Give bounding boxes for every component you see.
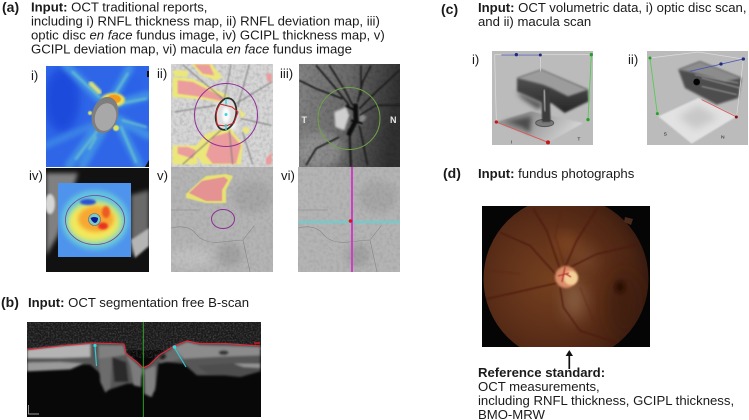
label c ii: ii) [628, 52, 638, 67]
reference standard text: OCT measurements, [478, 379, 600, 394]
image iii: optic disc en face fundus image: N [390, 115, 396, 125]
panel c heading: and ii) macula scan [478, 14, 591, 29]
panel a heading [2, 0, 385, 56]
label i: i) [31, 68, 38, 83]
label iv: iv) [29, 168, 43, 183]
panel c heading: (c) [441, 1, 458, 17]
image c ii: macula scan volume: S [664, 131, 668, 137]
image c ii: macula scan volume: N [721, 135, 725, 141]
image ii: RNFL deviation map [171, 64, 273, 167]
panel b heading: (b) [1, 294, 19, 310]
reference standard text: Reference standard: [478, 365, 605, 380]
panel a heading: optic disc en face fundus image, iv) GCIPL thickness map, v) [31, 28, 385, 42]
image v: GCIPL deviation map [168, 167, 273, 272]
reference standard text [478, 365, 734, 420]
fundus photograph [482, 206, 650, 347]
panel c heading [441, 0, 746, 29]
image iii: optic disc en face fundus image: T [302, 115, 308, 125]
panel a: OCT traditional reports [2, 0, 403, 272]
image iv: GCIPL thickness map [45, 168, 149, 272]
label ii: ii) [157, 66, 167, 81]
label vi: vi) [281, 168, 295, 183]
image iii: optic disc en face fundus image [298, 64, 403, 168]
panel a heading: GCIPL deviation map, vi) macula en face fundus image [31, 42, 352, 56]
image c i: optic disc scan volume: I [511, 139, 512, 145]
panel a heading: including i) RNFL thickness map, ii) RNFL deviation map, iii) [31, 14, 380, 28]
label iii: iii) [280, 66, 293, 81]
B-scan image [27, 322, 261, 417]
panel c heading: Input: OCT volumetric data, i) optic disc scan, [478, 0, 746, 15]
panel b: OCT segmentation free B-scan [1, 294, 261, 417]
image c ii: macula scan volume [647, 51, 748, 145]
image vi: macula en face fundus image [298, 167, 400, 272]
panel b heading: Input: OCT segmentation free B-scan [28, 295, 249, 310]
label v: v) [157, 168, 168, 183]
panel d: fundus photographs [443, 165, 734, 420]
panel c: OCT volumetric data [441, 0, 748, 145]
panel d heading: (d) [443, 165, 461, 181]
image c i: optic disc scan volume: T [577, 137, 580, 143]
image i: RNFL thickness map [44, 65, 149, 167]
image c i: optic disc scan volume [492, 51, 593, 145]
label c i: i) [472, 52, 479, 67]
arrow up to fundus photograph [566, 350, 573, 369]
reference standard text: including RNFL thickness, GCIPL thickness, [478, 393, 734, 408]
panel d heading: Input: fundus photographs [478, 166, 635, 181]
